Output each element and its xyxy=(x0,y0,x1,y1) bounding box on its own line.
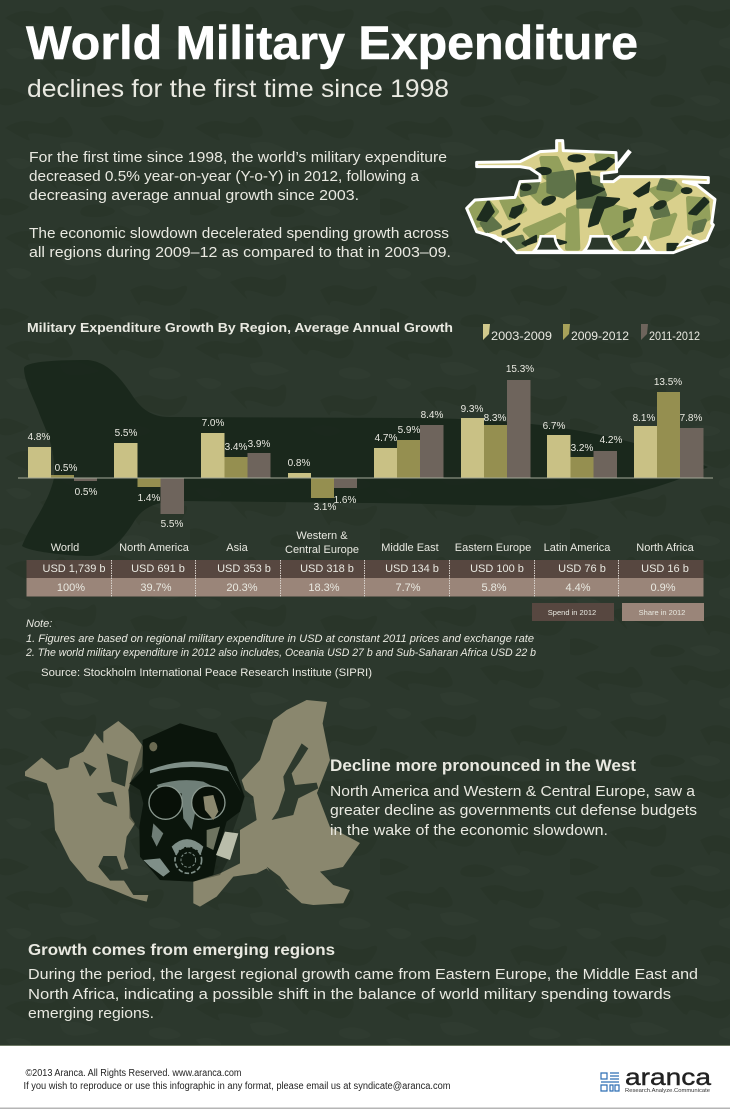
share row: 100% xyxy=(57,582,85,594)
notes xyxy=(25,618,536,659)
logo tagline: Research.Analyze.Communicate xyxy=(625,1088,710,1094)
chart legend xyxy=(483,324,700,343)
subtitle: declines for the first time since 1998 xyxy=(27,75,449,103)
spend row: USD 1,739 b xyxy=(43,563,105,575)
body text: During the period, the largest regional growth came from Eastern Europe, the Middle East and xyxy=(28,966,698,983)
value labels: 4.7% xyxy=(375,433,398,444)
icon: camouflage tank xyxy=(463,138,720,255)
value labels xyxy=(28,364,703,530)
notes: 2. The world military expenditure in 2012 also includes, Oceania USD 27 b and Sub-Saharan Africa USD 22 b xyxy=(25,647,536,659)
intro text block: For the first time since 1998, the world’s military expenditure xyxy=(29,149,447,166)
region names: Latin America xyxy=(544,542,611,554)
intro text block: The economic slowdown decelerated spending growth across xyxy=(29,225,449,242)
copyright text: ©2013 Aranca. All Rights Reserved. www.aranca.com xyxy=(26,1068,242,1079)
region names: Central Europe xyxy=(285,544,359,556)
spend row: USD 318 b xyxy=(300,563,354,575)
chart heading: Military Expenditure Growth By Region, Average Annual Growth xyxy=(27,320,453,335)
share row: 7.7% xyxy=(395,582,421,594)
spend row: USD 76 b xyxy=(558,563,606,575)
value labels: 3.4% xyxy=(225,442,248,453)
value labels: 4.2% xyxy=(600,435,623,446)
value labels: 5.5% xyxy=(161,519,184,530)
map: inland seas xyxy=(83,743,318,890)
value labels: 0.8% xyxy=(288,458,311,469)
bars: 2009-2012 xyxy=(51,392,680,498)
body text: North America and Western & Central Europe, saw a xyxy=(330,783,696,800)
icon: aranca logo mark xyxy=(601,1073,619,1091)
chart legend: 2003-2009 xyxy=(491,331,552,343)
spend row: USD 100 b xyxy=(470,563,524,575)
value labels: 1.6% xyxy=(334,495,357,506)
spend row xyxy=(26,560,704,578)
value labels: 4.8% xyxy=(28,432,51,443)
value labels: 1.4% xyxy=(138,493,161,504)
value labels: 6.7% xyxy=(543,421,566,432)
map: Europe xyxy=(193,700,360,907)
value labels: 8.1% xyxy=(633,413,656,424)
intro text block: decreasing average annual growth since 2003. xyxy=(29,187,359,204)
share row: 18.3% xyxy=(308,582,340,594)
value labels: 13.5% xyxy=(654,377,682,388)
body text xyxy=(330,783,697,839)
bars: 2003-2009 xyxy=(28,418,657,478)
region names: North Africa xyxy=(636,542,695,554)
value labels: 8.4% xyxy=(421,410,444,421)
region names: Middle East xyxy=(381,542,439,554)
heading: Decline more pronounced in the West xyxy=(330,756,636,775)
body text: in the wake of the economic slowdown. xyxy=(330,822,608,839)
title: World Military Expenditure xyxy=(26,16,638,69)
plane silhouette behind chart xyxy=(22,360,708,556)
value labels: 5.9% xyxy=(398,425,421,436)
share row xyxy=(26,578,704,596)
section: growth from emerging regions xyxy=(28,942,698,1022)
map with gas mask xyxy=(25,700,360,907)
map: North America xyxy=(25,721,148,902)
copyright text: If you wish to reproduce or use this infographic in any format, please email us at syndicate@aranca.com xyxy=(24,1081,450,1092)
table key: Spend in 2012 xyxy=(548,608,596,617)
body text: greater decline as governments cut defense budgets xyxy=(330,802,697,819)
region names xyxy=(51,530,695,556)
value labels: 0.5% xyxy=(75,487,98,498)
value labels: 15.3% xyxy=(506,364,534,375)
value labels: 7.0% xyxy=(202,418,225,429)
value labels: 3.9% xyxy=(248,439,271,450)
gas mask soldier xyxy=(129,723,245,882)
value labels: 3.2% xyxy=(571,443,594,454)
value labels: 0.5% xyxy=(55,463,78,474)
share row: 5.8% xyxy=(481,582,507,594)
value labels: 8.3% xyxy=(484,413,507,424)
body text: emerging regions. xyxy=(28,1005,154,1022)
notes: 1. Figures are based on regional military expenditure in USD at constant 2011 prices and exchange rate xyxy=(26,633,534,645)
chart legend: 2011-2012 xyxy=(649,331,700,343)
table key xyxy=(532,603,704,621)
notes: Note: xyxy=(26,618,52,630)
intro text block: decreased 0.5% year-on-year (Y-o-Y) in 2012, following a xyxy=(29,168,420,185)
share row: 4.4% xyxy=(565,582,591,594)
spend row: USD 134 b xyxy=(385,563,439,575)
footer xyxy=(0,1045,730,1109)
region names: North America xyxy=(119,542,190,554)
value labels: 7.8% xyxy=(680,413,703,424)
region names: Western & xyxy=(296,530,348,542)
value labels: 9.3% xyxy=(461,404,484,415)
bar chart xyxy=(18,364,713,530)
share row: 39.7% xyxy=(140,582,172,594)
bars: 2011-2012 xyxy=(74,380,704,514)
region names: World xyxy=(51,542,79,554)
baseline axis xyxy=(18,478,713,479)
data table xyxy=(26,560,704,597)
region names: Asia xyxy=(226,542,249,554)
spend row: USD 353 b xyxy=(217,563,271,575)
intro text block: all regions during 2009–12 as compared to that in 2003–09. xyxy=(29,244,451,261)
spend row: USD 16 b xyxy=(641,563,689,575)
chart legend: 2009-2012 xyxy=(571,331,629,343)
spend row: USD 691 b xyxy=(131,563,185,575)
intro text block xyxy=(29,149,451,261)
body text: North Africa, indicating a possible shift in the balance of world military spending towards xyxy=(28,986,671,1003)
body text xyxy=(28,966,698,1022)
value labels: 5.5% xyxy=(115,428,138,439)
share row: 20.3% xyxy=(226,582,258,594)
region names: Eastern Europe xyxy=(455,542,531,554)
section: decline in the West xyxy=(330,756,697,839)
source: Source: Stockholm International Peace Research Institute (SIPRI) xyxy=(41,667,372,679)
table key: Share in 2012 xyxy=(639,608,685,617)
share row: 0.9% xyxy=(650,582,676,594)
logo wordmark: aranca xyxy=(625,1064,711,1090)
heading: Growth comes from emerging regions xyxy=(28,942,335,959)
value labels: 3.1% xyxy=(314,502,337,513)
copyright text xyxy=(24,1068,450,1092)
